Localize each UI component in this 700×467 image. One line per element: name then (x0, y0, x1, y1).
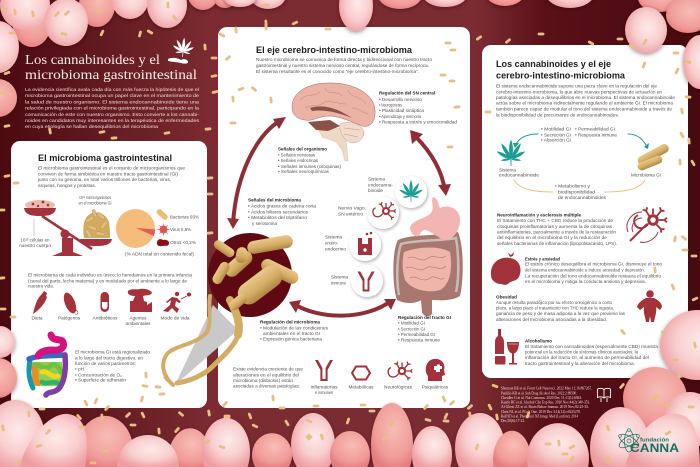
text block: regional microbiome: a lo largo del tracto digestivo, en (75, 356, 143, 360)
icon: inflamatorias (315, 360, 333, 381)
diagram: endocannabinoid-microbiome (496, 126, 670, 200)
icon: bacteria (636, 142, 670, 172)
heading: cerebro-intestino-microbioma (496, 70, 626, 82)
section: neuroinflamación: señales bacterianas de inflamación (lipopolisacárido, LPS). (497, 241, 617, 246)
text block: regulación SN central: • Plasticidad sináptica (379, 108, 424, 113)
text block: dysbiosis: alteraciones en el equilibrio del (233, 372, 299, 377)
label: 10¹³ células en (20, 238, 50, 242)
text block: intro: cerebro-intestino-microbioma, lo que abre nuevas perspectivas de actuación en (496, 90, 662, 94)
text block: regulación del tracto GI (398, 315, 451, 342)
label (331, 274, 348, 286)
text block: regulación SN central: • Neurogénesis (379, 102, 403, 107)
icon: factory (128, 289, 152, 312)
references: Chen NL et al. PLoS One. 2019 Dec 3;14(12):e0225270. (501, 409, 581, 414)
section: estrés y ansiedad: El estrés crónico desequilibra el microbioma GI, disminuye el tono (525, 262, 662, 266)
logo: Fundación CANNA (617, 429, 679, 455)
intro text: La evidencia científica avala cada día con más fuerza la hipótesis de que el (25, 87, 199, 92)
label: endocannabinoide (499, 172, 539, 178)
icon row: factors (33, 289, 191, 315)
section: alcoholismo: inflamación del tracto GI, al aumento de permeabilidad del (525, 355, 649, 360)
section: neuroinflamación: del equilibrio en el microbioma GI y la reducción de (497, 235, 607, 240)
icon: capsule (100, 292, 109, 312)
text block: regulación SN central: • Aprendizaje y memoria (379, 114, 421, 119)
text block: definition: conviven de forma simbiótica en nuestro tracto gastrointestinal (GI) (38, 172, 178, 176)
intro text: relación privilegiada con el microbioma gastrointestinal, participando en la (25, 106, 200, 111)
text block: intro (256, 57, 432, 74)
references: Ball SD et al. Pharmacol NZ Integr Med (Larchmt). 2014 (501, 413, 579, 418)
label (325, 234, 346, 252)
bullet lists: • Permeabilidad GI (575, 126, 615, 132)
icon labels: Modo de vida (160, 316, 190, 320)
text block: definition: El microbioma gastrointestinal es el conjunto de microorganismos que (38, 166, 185, 170)
text block: dysbiosis: Existe evidencia creciente de que (233, 366, 303, 372)
heading (496, 59, 626, 82)
section: neuroinflamación: Neuroinflamación y esclerosis múltiple (497, 212, 581, 218)
text block: regulación del microbioma: • Expresión génica bacteriana (260, 336, 322, 342)
text block: señales del organismo: • Señales endocrinas (278, 158, 319, 163)
text block: unique microbiome: El microbioma de cada individuo es único: lo heredamos en la primera infancia (28, 272, 192, 278)
icon circle: sistema endocannabinoide (395, 176, 427, 208)
bullet list: biodisponibilidad (558, 190, 595, 194)
bullet lists: • Absorción GI (541, 138, 571, 142)
text block: intro: Nuestro microbioma se comunica de forma directa y bidireccional con nuestro tracto (256, 57, 432, 62)
text block: señales del organismo: • Señales nerviosas (278, 152, 316, 158)
icon: obese person (637, 290, 662, 322)
icon labels: Dieta (32, 316, 43, 320)
label (499, 168, 539, 178)
scale diagram (19, 195, 112, 256)
references: Al-Ghezi ZZ et al. Brain Behav Immun. 2019 Nov;82:25-35. (501, 404, 589, 409)
section: obesidad: Aunque resulta paradójico por su efecto orexigénico a corto (496, 300, 612, 305)
section: obesidad: Obesidad (496, 294, 517, 300)
intro text: en cuya etiología se hallan desequilibrios del microbioma (25, 124, 159, 129)
text block: regulación del tracto GI: Regulación del tracto GI (398, 315, 451, 320)
gut axis labels (325, 176, 427, 297)
icon labels: Patógenos (58, 316, 81, 320)
icon: neurológicas (388, 362, 412, 380)
bullet lists: • Motilidad GI (541, 126, 571, 132)
label: en el microbioma GI (78, 200, 112, 206)
text block: señales del organismo: Señales del organismo (278, 146, 327, 152)
text block: unique microbiome (28, 272, 192, 289)
label: 10¹⁴ microorganismos (79, 195, 111, 200)
text block: unique microbiome: nuestra vida. (28, 284, 54, 289)
text block: intro: El sistema resultante es el conocido como “eje cerebro-intestino-microbioma”. (256, 69, 419, 74)
text block: intro: El sistema endocannabinoide supone una pieza clave en la regulación del eje (496, 84, 657, 88)
panel: el eje cerebro-intestino-microbioma (218, 27, 470, 408)
icon circle: sistema inmune (351, 265, 383, 297)
text block: regional microbiome (75, 350, 150, 382)
label: Sistema (325, 234, 342, 240)
section: neuroinflamación (497, 207, 667, 246)
icon: cannabis leaf and hand (168, 37, 195, 64)
bullet lists: • Respuesta inmune (575, 132, 617, 138)
legend: virus: Virus 5,8% (170, 227, 191, 232)
text block: regulación SN central (379, 90, 457, 124)
icon labels: Antibióticos (92, 316, 118, 320)
intro text: la salud de nuestro organismo. El sistema endocannabinoide tiene una (25, 99, 200, 104)
text block: unique microbiome: (canal del parto, leche materna) y es modulado por el ambiente a lo largo de (28, 278, 187, 283)
label: entero- (325, 240, 338, 246)
text block: regional microbiome: • Superficie de adhesión (75, 378, 126, 382)
text block: regional microbiome: • pH (75, 366, 84, 372)
references: Dec;50(6):17-22. (501, 418, 525, 423)
icon labels: Agentes (130, 316, 147, 320)
section: alcoholismo: Alcoholismo (525, 338, 552, 344)
bullet lists: • Secreción GI (541, 132, 571, 138)
references: Kandy BC et al. Alcohol Clin Exp Res. 2020 Nov;44(2):340-353. (501, 400, 590, 404)
bullet list (555, 184, 607, 200)
references: Cheidler G et al. Nat Commun. 2020 Dec 11;11(1):6363. (501, 395, 582, 400)
section: obesidad: ganancia de peso y de masa adiposa a la vez que previene las (496, 311, 626, 316)
label: inmune (331, 280, 346, 286)
icon: carrot (33, 291, 47, 314)
label: endocrino (325, 246, 346, 252)
text block: señales del organismo: • Señales inmunes (citoquinas) (278, 164, 341, 169)
intro text: comunicación de este con nuestro organismo. Esto convierte a los cannabi- (25, 112, 200, 117)
icon: cannabis (496, 139, 526, 166)
intro text: microbioma gastrointestinal ocupa un papel clave en el mantenimiento de (25, 93, 200, 98)
text block: dysbiosis: asociadas a diversas patologías: (233, 384, 300, 388)
section: estrés y ansiedad: Estrés y ansiedad (525, 256, 560, 262)
text block: señales del microbioma: • Metabolitos del triptófano (248, 215, 307, 220)
text block: regulación del microbioma: • Modulación de las condiciones (260, 326, 329, 330)
pathology labels: Neurológicas (384, 384, 413, 390)
circular arrows (227, 117, 451, 316)
label: Sistema (499, 168, 516, 172)
gut illustration (393, 197, 463, 316)
icon: wine bottle and glass (495, 329, 519, 364)
section: neuroinflamación: citoquinas proinflamatorias y aumenta la de citoquinas (497, 224, 613, 229)
intro text: noides en candidatos muy interesantes en la terapéutica de enfermedades (25, 118, 200, 123)
icon labels (32, 316, 190, 326)
icon: psiquiátricas (426, 359, 445, 381)
text block: intro: también parece capaz de modular el tono del sistema endocannabinoide a través de (496, 106, 672, 112)
icon: rainbow gut (29, 335, 65, 395)
title: microbioma gastrointestinal (25, 68, 197, 83)
text block: señales del microbioma (248, 198, 316, 226)
section: estrés y ansiedad (491, 252, 662, 285)
section: alcoholismo: tracto gastrointestinal y la alteración del microbioma. (525, 361, 635, 366)
heading: Los cannabinoides y el eje (496, 59, 611, 70)
section: estrés y ansiedad: La recuperación del tono endocannabinoide restaura el equilibrio (525, 274, 661, 278)
text block: dysbiosis (233, 366, 303, 388)
text block: señales del microbioma: • Ácidos biliares secundarios (248, 208, 309, 214)
pie chart: (% ADN total en contenido fecal) (125, 252, 194, 256)
text block: regulación del tracto GI: • Respuesta inmune (398, 338, 440, 342)
text block: regulación del microbioma (260, 320, 329, 342)
panel: los cannabinoides y el eje (482, 45, 688, 378)
section: obesidad: plazo, a largo plazo el tratamiento con THC reduce la ingesta, (496, 306, 614, 310)
panel: left intro title and text (25, 37, 200, 129)
text block: intro: patologías asociadas a desequilibrios en el microbioma. El sistema endocannabinoide (496, 95, 675, 100)
text block: regulación del tracto GI: • Permeabilidad GI (398, 332, 435, 337)
label: nuestro cuerpo (19, 243, 51, 248)
references: Sherman BE et al. Front Cell Neurosci. 2022 May 11;16:867267. (501, 386, 592, 390)
references (501, 386, 592, 423)
label: SN entérico (338, 212, 363, 216)
label: Nervio Vago, (338, 206, 366, 210)
icon: stressed brain (491, 252, 521, 285)
legend: bacterias: Bacterias 93% (170, 214, 199, 219)
balloons behind panels (0, 0, 682, 117)
text block: regional microbiome: • Concentración de O₂ (75, 372, 122, 377)
icon labels: ambientales (126, 321, 151, 326)
label (338, 206, 366, 216)
big bacteria illustration (163, 233, 301, 385)
icon circle: nervio vago (367, 197, 399, 229)
icon: demyelinated neuron (627, 207, 667, 242)
text block: intro: actúa sobre el microbioma indirectamente regulando el ambiente GI. El microbioma (496, 100, 673, 106)
icon: runner (163, 292, 191, 313)
label: Microbioma GI (631, 172, 661, 178)
text block: definition: arqueas, hongos y protistas. (38, 183, 96, 188)
section: alcoholismo (495, 329, 658, 366)
text block: señales del microbioma: y serotonina (252, 221, 277, 226)
text block: intro: la biodisponibilidad de precursores de endocannabinoides. (496, 112, 619, 118)
pathology labels: Psiquiátricas (422, 384, 449, 390)
text block: definition (37, 166, 185, 188)
title (25, 53, 197, 83)
label: Sistema (331, 274, 348, 280)
title: Los cannabinoides y el (25, 53, 160, 68)
pie chart (116, 208, 199, 256)
text block: regulación SN central: • Desarrollo nervioso (379, 97, 422, 102)
section: alcoholismo: potencial en la reducción de síntomas clínicos asociados, la (525, 350, 638, 354)
icon: metabólicas (352, 366, 370, 380)
pathology labels (310, 384, 449, 395)
heading: El microbioma gastrointestinal (38, 153, 172, 163)
text block: señales del organismo (278, 146, 341, 174)
legend: otros: Otros <0,2% (170, 240, 196, 245)
label: Sistema (368, 176, 385, 182)
section: neuroinflamación: antiinflamatorias, parcialmente a través de la restauración (497, 229, 616, 234)
section: estrés y ansiedad: en el microbioma y mitiga la conducta ansiosa y depresiva. (525, 279, 646, 284)
intro text (25, 87, 200, 129)
icon: brain (292, 83, 375, 161)
label (368, 176, 393, 193)
label (78, 195, 112, 206)
bullet lists (541, 126, 617, 142)
label: endocanna- (368, 182, 393, 188)
section: alcoholismo: El tratamiento con cannabinoides (especialmente CBD) muestra (525, 344, 658, 349)
text block: intro: gastrointestinal y nuestro sistema nervioso central, regulándose de forma recíproca. (256, 63, 429, 68)
logo: Fundación CANNA: CANNA (630, 441, 679, 455)
text block: regional microbiome: El microbioma GI está regionalizado (75, 350, 150, 354)
bullet list: • Metabolismo y (555, 184, 591, 188)
pathology labels: Metabólicas (348, 384, 374, 390)
text block: regulación del tracto GI: • Secreción GI (398, 326, 425, 331)
label (19, 238, 51, 248)
section: obesidad (496, 290, 662, 322)
logo: Fundación CANNA: fundación (640, 438, 670, 444)
text block: señales del microbioma: Señales del microbioma (248, 198, 301, 202)
label: binoide (368, 188, 383, 193)
icon: book (598, 388, 610, 402)
text block: dysbiosis: microbioma (disbiosis) están (233, 378, 293, 383)
text block: regulación del microbioma: ambientales en el tracto GI (263, 331, 320, 336)
text block: regulación SN central: • Respuesta a estrés y emocionalidad (379, 120, 457, 124)
text block: regulación del microbioma: Regulación del microbioma (260, 320, 320, 324)
text block: definition: junto con su genoma, en total varios trillones de bacterias, virus, (37, 177, 171, 182)
text block: señales del microbioma: • Ácidos grasos de cadena corta (248, 202, 316, 208)
text block: intro (496, 84, 675, 118)
text block: señales del organismo: • Señales neuroquímicas (278, 169, 330, 174)
icon circle: sistema enteroendocrino (349, 229, 381, 261)
section: estrés y ansiedad: del sistema endocannabinoide e induce ansiedad y depresión. (525, 267, 645, 272)
pathology labels: Inflamatorias (310, 384, 338, 390)
text block: regulación del tracto GI: • Motilidad GI (398, 320, 425, 326)
icon: pathogen (61, 291, 79, 315)
bullet list: de endocannabinoides (558, 195, 607, 200)
section: obesidad: alteraciones del microbioma asociadas a la obesidad. (496, 317, 607, 322)
icon: atom (617, 429, 641, 452)
text block: regulación SN central: Regulación del SN central (379, 90, 435, 96)
panel: el microbioma gastrointestinal (11, 141, 207, 408)
heading: El eje cerebro-intestino-microbioma (256, 45, 413, 56)
pathology labels: e inmunes (315, 390, 334, 395)
section: neuroinflamación: El tratamiento con THC + CBD reduce la producción de (497, 218, 613, 223)
references: Panlilio KR et al. Sub Drug Alcohol Res. 2022;2:89590. (501, 390, 577, 395)
text block: regional microbiome: función de varios parámetros: (75, 361, 136, 366)
